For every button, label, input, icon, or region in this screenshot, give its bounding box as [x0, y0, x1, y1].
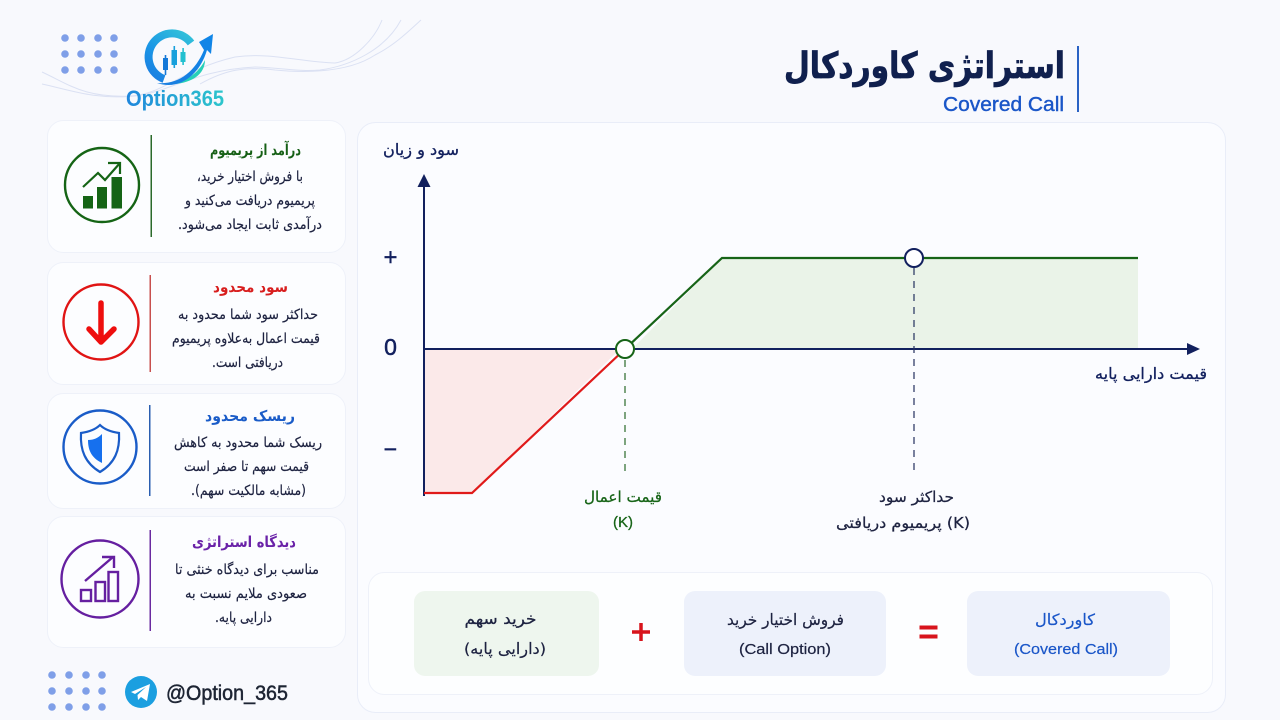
box: sell call: (Call Option)	[739, 641, 831, 658]
card text	[172, 307, 320, 371]
logo	[61, 33, 224, 111]
box: covered call: (Covered Call)	[1014, 641, 1118, 658]
strike marker	[616, 340, 634, 358]
icon: telegram	[125, 676, 157, 708]
card text: (مشابه مالکیت سهم).	[191, 483, 306, 499]
card text: صعودی ملایم نسبت به	[185, 586, 307, 602]
subtitle: Covered Call	[943, 94, 1064, 116]
heading: strategy name: استراتژی کاوردکال	[784, 46, 1065, 87]
icon: blue shield	[64, 410, 136, 484]
telegram handle	[48, 671, 288, 711]
loss line	[424, 349, 625, 493]
card text: دریافتی است.	[212, 355, 283, 371]
strike label: قیمت اعمال	[584, 488, 662, 506]
icon: purple growth chart	[62, 540, 138, 618]
card text: حداکثر سود شما محدود به	[178, 307, 318, 323]
chart: covered call payoff	[383, 141, 1207, 533]
x axis title: قیمت دارایی پایه	[1095, 365, 1207, 384]
card text: ریسک شما محدود به کاهش	[174, 435, 322, 451]
panel: premium income	[48, 120, 346, 252]
card text: قیمت سهم تا صفر است	[184, 459, 309, 475]
box: covered call: کاوردکال	[1035, 611, 1096, 630]
max profit label: (K) پریمیوم دریافتی	[836, 514, 970, 533]
box: buy stock: خرید سهم	[464, 610, 536, 629]
card text	[178, 169, 322, 233]
panel: payoff chart	[358, 122, 1226, 712]
x axis arrow	[424, 343, 1200, 355]
max profit guide	[913, 268, 915, 475]
max profit label: حداکثر سود	[879, 488, 954, 506]
handle text: @Option_365	[166, 682, 288, 705]
equals sign	[920, 626, 938, 638]
loss area	[424, 349, 620, 493]
card text: قیمت اعمال به‌علاوه پریمیوم	[172, 331, 320, 347]
strike guide	[624, 360, 626, 475]
strike label: (K)	[613, 514, 633, 531]
card text: پریمیوم دریافت می‌کنید و	[184, 193, 315, 209]
icon: rising green bars	[65, 148, 139, 222]
icon: option365 ring and arrow	[149, 33, 213, 85]
card heading: درآمد از پریمیوم	[210, 141, 301, 160]
box: sell call: فروش اختیار خرید	[727, 611, 844, 630]
logo wordmark: Option365	[126, 86, 224, 111]
card text	[175, 561, 319, 626]
box: sell call	[684, 591, 886, 676]
y axis arrow	[418, 174, 430, 496]
card heading: دیدگاه استراتژی	[192, 533, 296, 551]
box: buy stock: (دارایی پایه)	[464, 640, 546, 659]
y axis title: سود و زیان	[383, 141, 459, 160]
card text: مناسب برای دیدگاه خنثی تا	[175, 561, 319, 578]
max profit marker	[905, 249, 923, 267]
profit area	[632, 258, 1138, 349]
title	[784, 46, 1079, 116]
icon: decorative dot grid	[61, 34, 118, 74]
strike label	[584, 488, 662, 531]
max profit label	[836, 488, 970, 533]
box: buy stock	[414, 591, 599, 676]
icon: decorative dot grid	[48, 671, 106, 711]
plus sign	[632, 623, 650, 641]
profit line	[625, 258, 1138, 349]
card heading: سود محدود	[213, 278, 288, 296]
panel: strategy view	[48, 516, 346, 648]
plus tick label: +	[383, 244, 398, 271]
card text: با فروش اختیار خرید،	[197, 169, 303, 185]
card text	[174, 435, 322, 499]
icon: red down arrow	[64, 284, 138, 360]
card text: دارایی پایه.	[215, 610, 272, 626]
panel: limited profit	[48, 262, 346, 384]
zero tick label: 0	[384, 334, 397, 360]
card heading: ریسک محدود	[205, 407, 295, 425]
panel: formula	[368, 572, 1212, 694]
box: covered call	[967, 591, 1170, 676]
panel: limited risk	[48, 394, 346, 508]
card text: درآمدی ثابت ایجاد می‌شود.	[178, 216, 322, 233]
minus tick label: −	[384, 436, 397, 462]
